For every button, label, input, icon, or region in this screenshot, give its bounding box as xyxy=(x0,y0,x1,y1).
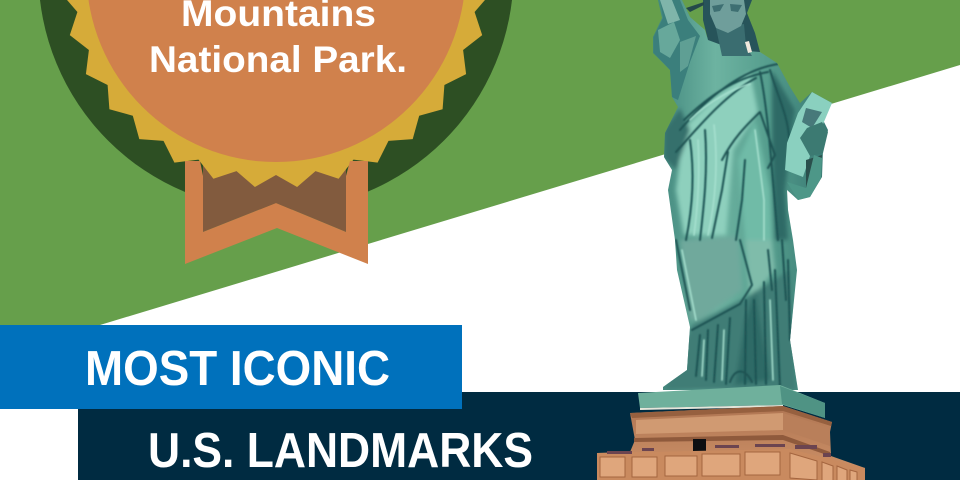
statue robe dark folds xyxy=(676,64,790,388)
title banner: most iconic: MOST ICONIC xyxy=(85,342,390,396)
statue robe light folds xyxy=(682,84,773,380)
pedestal terrace panels xyxy=(600,452,857,480)
ribbon: orange outer band xyxy=(185,161,368,264)
pedestal doorway xyxy=(693,439,706,451)
pedestal xyxy=(597,406,865,480)
pedestal visitors xyxy=(607,444,831,457)
medal text: National Park. xyxy=(149,39,407,80)
background: navy band xyxy=(78,392,960,480)
title banner: most iconic xyxy=(0,325,462,409)
medal: gold serrated seal xyxy=(62,0,490,187)
ribbon: brown inner fold xyxy=(203,150,346,232)
illustration: Statue of Liberty xyxy=(597,0,865,480)
background: green diagonal field xyxy=(0,0,960,325)
medal: dark green outer disc xyxy=(38,0,514,210)
statue head and hair xyxy=(703,0,760,56)
statue figure xyxy=(653,0,832,390)
medal: orange centre disc xyxy=(86,0,466,162)
pedestal terrace wall xyxy=(597,449,865,480)
statue book and hand xyxy=(785,92,832,200)
statue raised arm xyxy=(654,0,704,100)
statue robe tonal areas xyxy=(664,64,796,390)
title banner: U.S. landmarks: U.S. LANDMARKS xyxy=(148,424,533,478)
medal text xyxy=(149,0,407,80)
medal badge xyxy=(38,0,514,264)
statue green plinth xyxy=(638,385,825,418)
